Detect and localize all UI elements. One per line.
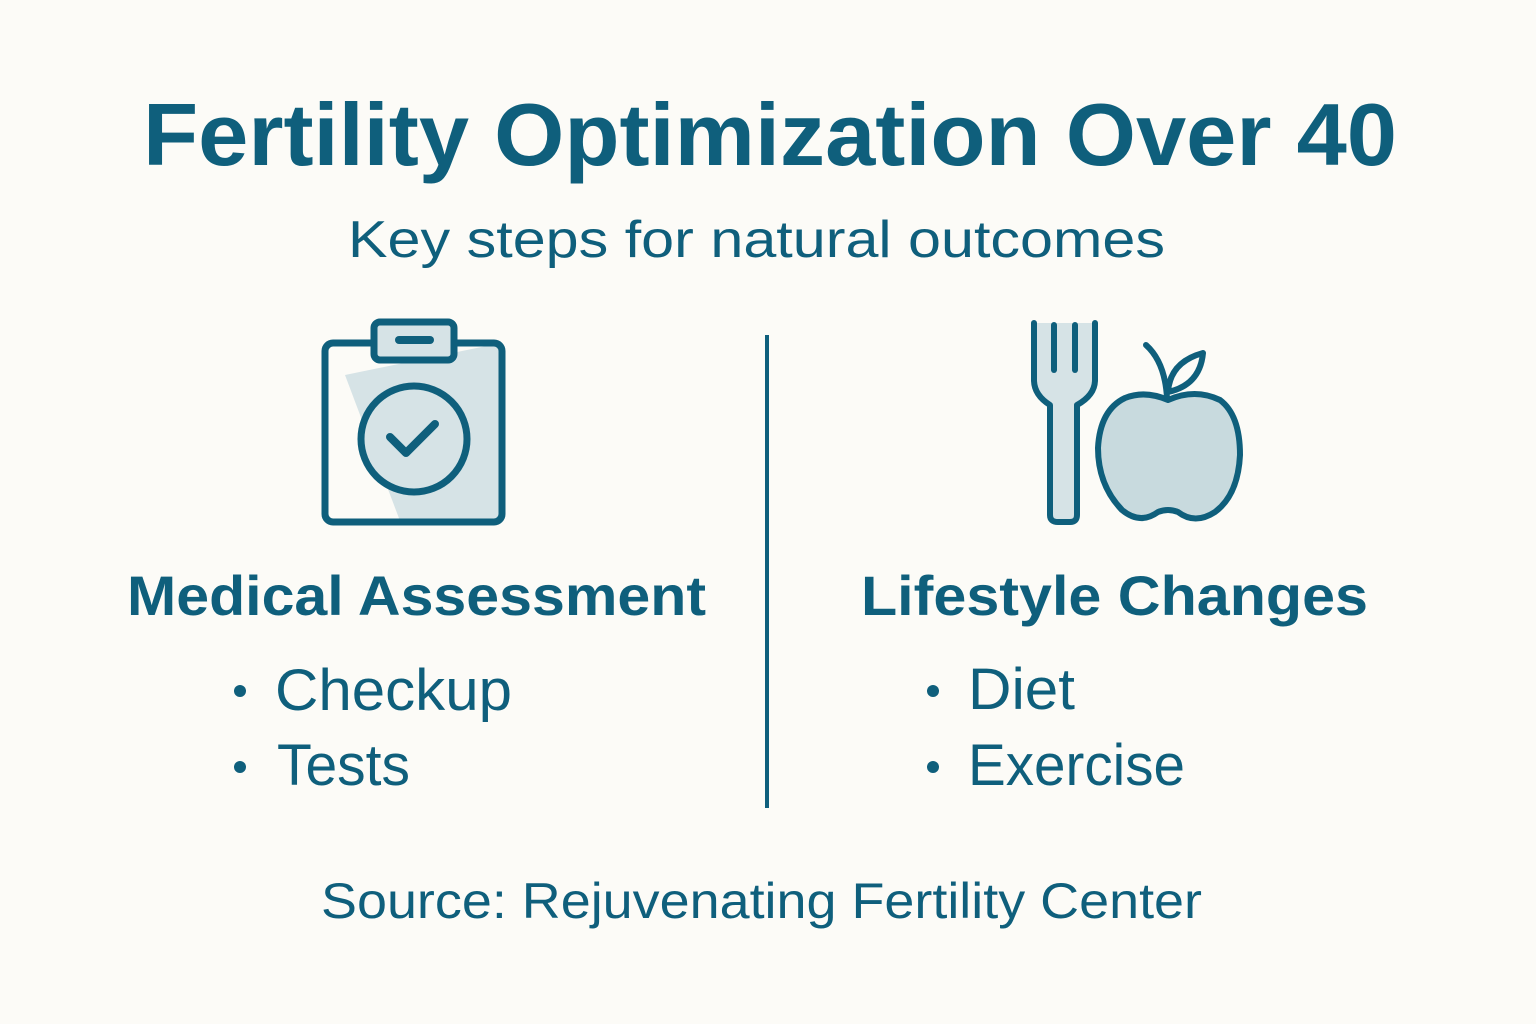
list: medical <box>234 658 512 798</box>
subtitle: Key steps for natural outcomes <box>348 211 1165 269</box>
fork <box>1034 323 1095 522</box>
list: medical: Tests <box>277 733 410 798</box>
icon: fork and apple <box>1034 323 1240 522</box>
list: lifestyle <box>927 657 1185 798</box>
source: Source: Rejuvenating Fertility Center <box>321 873 1202 929</box>
divider <box>765 335 769 808</box>
heading: Medical Assessment: Medical Assessment <box>127 564 706 627</box>
list: lifestyle: Diet <box>968 657 1075 722</box>
heading: Lifestyle Changes: Lifestyle Changes <box>861 564 1368 627</box>
apple <box>1098 394 1240 518</box>
list: medical: Checkup <box>275 658 512 723</box>
title: Fertility Optimization Over 40 <box>143 85 1397 184</box>
icon: clipboard with checkmark <box>325 322 502 522</box>
list: lifestyle: Exercise <box>968 733 1185 798</box>
